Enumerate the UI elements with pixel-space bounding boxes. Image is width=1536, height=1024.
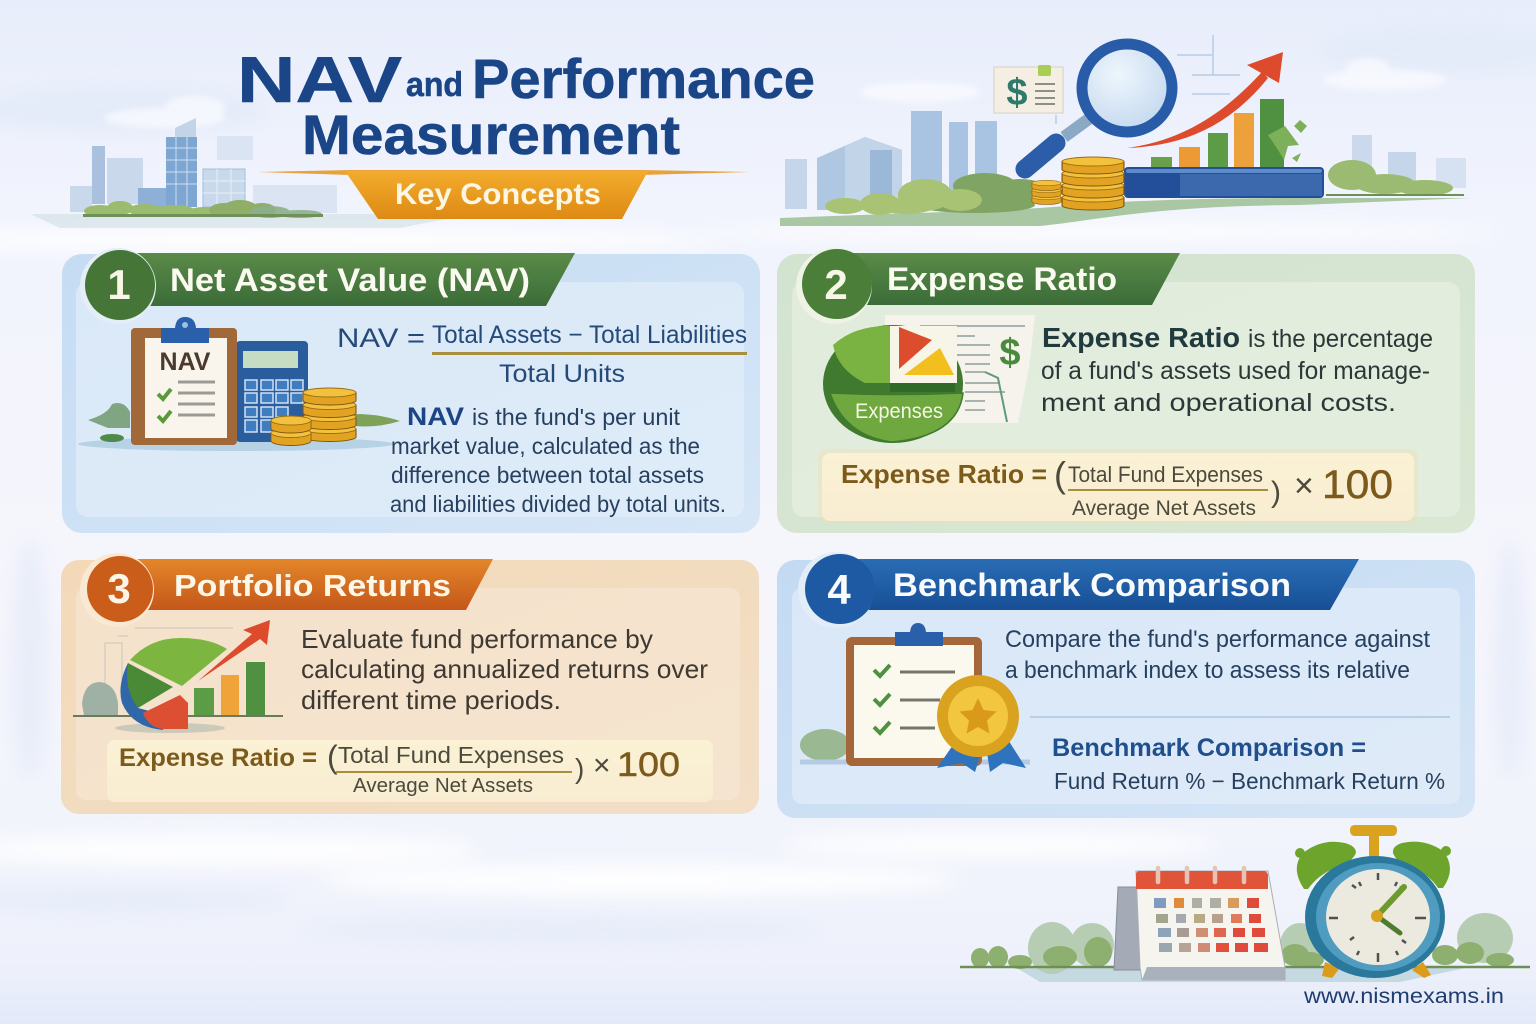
NAV formula: Total Assets − Total Liabilities [432, 321, 747, 349]
panel 2 heading: Expense Ratio [887, 261, 1117, 297]
subtitle ribbon: Key Concepts [395, 178, 601, 211]
Expense Ratio formula box: 100 [1322, 463, 1393, 507]
NAV description: NAV [407, 403, 464, 431]
skyline left [30, 118, 470, 228]
title [237, 43, 815, 166]
NAV formula [337, 321, 747, 388]
icon: expenses pie chart and document: $ [999, 332, 1021, 374]
Portfolio Returns description: Evaluate fund performance by [301, 624, 653, 654]
Portfolio Returns formula box: 100 [617, 746, 680, 784]
subtitle ribbon [258, 170, 750, 219]
icon: expenses pie chart and document [823, 315, 1035, 443]
icon: NAV clipboard with calculator and coins: NAV [160, 348, 211, 376]
panel 4 heading: Benchmark Comparison [893, 567, 1291, 603]
panel 2 heading: 2 [824, 261, 848, 308]
icon: coin stacks [1032, 157, 1124, 210]
icon: calendar [1114, 868, 1285, 980]
clouds [105, 58, 1447, 128]
NAV description [390, 403, 726, 517]
Benchmark formula [1052, 734, 1445, 794]
Expense Ratio description: of a fund's assets used for manage- [1041, 357, 1430, 385]
icon: alarm clock [1295, 825, 1451, 978]
panel 1: Net Asset Value [62, 248, 760, 533]
Portfolio Returns formula box: ( [327, 739, 338, 775]
Benchmark formula: Benchmark Comparison = [1052, 734, 1366, 762]
title: Performance [472, 47, 815, 110]
Expense Ratio description: Expense Ratio [1042, 322, 1240, 353]
Expense Ratio formula box [818, 449, 1418, 523]
Portfolio Returns description: calculating annualized returns over [301, 654, 708, 684]
Expense Ratio description: is the percentage [1248, 325, 1433, 353]
panel 3 heading [80, 553, 493, 627]
illustration: calendar and alarm clock [960, 825, 1530, 982]
panel 4: Benchmark Comparison [777, 552, 1475, 818]
website credit: www.nismexams.in [1303, 985, 1504, 1008]
Portfolio Returns formula box: Expense Ratio = [119, 744, 317, 772]
NAV formula: Total Units [499, 360, 625, 388]
panel 1 heading: 1 [107, 261, 131, 308]
panel 3 heading: 3 [107, 565, 131, 612]
title: NAV [237, 43, 402, 116]
panel 3 heading: Portfolio Returns [174, 568, 451, 603]
illustration: growth chart and magnifier [780, 35, 1470, 226]
Expense Ratio formula box: × [1294, 467, 1314, 505]
panel 2: Expense Ratio [777, 248, 1475, 533]
NAV description: and liabilities divided by total units. [390, 491, 726, 517]
panel 4 heading [798, 552, 1359, 628]
icon: expenses pie chart and document: Expenses [855, 400, 943, 423]
Portfolio Returns formula box [107, 739, 713, 802]
Expense Ratio formula box: Total Fund Expenses [1068, 462, 1263, 487]
icon: returns chart with pie [73, 620, 283, 733]
NAV description: is the fund's per unit [472, 404, 681, 430]
title: and [406, 66, 463, 104]
Portfolio Returns formula box: Average Net Assets [353, 775, 533, 797]
Portfolio Returns description [301, 624, 708, 715]
icon: dollar note: $ [1006, 72, 1028, 114]
panel 2 heading [796, 248, 1180, 324]
panel 3: Portfolio Returns [61, 553, 759, 814]
Portfolio Returns formula box: × [593, 749, 611, 782]
NAV formula: NAV = [337, 323, 425, 353]
NAV description: market value, calculated as the [391, 433, 700, 459]
NAV description: difference between total assets [391, 462, 704, 488]
title: Measurement [302, 103, 680, 166]
Expense Ratio formula box: ( [1054, 454, 1066, 495]
Benchmark description: Compare the fund's performance against [1005, 626, 1430, 653]
Benchmark description: a benchmark index to assess its relative [1005, 657, 1410, 684]
Portfolio Returns formula box: ) [575, 753, 584, 784]
Expense Ratio description: ment and operational costs. [1041, 389, 1396, 417]
panel 1 heading: Net Asset Value (NAV) [170, 262, 530, 298]
Expense Ratio formula box: ) [1271, 476, 1281, 509]
icon: clipboard with award medal [800, 623, 1030, 772]
Portfolio Returns formula box: Total Fund Expenses [338, 742, 564, 768]
Expense Ratio formula box: Expense Ratio = [841, 459, 1047, 489]
Expense Ratio description [1041, 322, 1433, 417]
panel 4 heading: 4 [827, 566, 851, 613]
Expense Ratio formula box: Average Net Assets [1072, 497, 1256, 520]
icon: NAV clipboard with calculator and coins [78, 317, 400, 451]
icon: magnifying glass [1025, 44, 1172, 169]
Benchmark formula: Fund Return % − Benchmark Return % [1054, 768, 1445, 794]
panel 1 heading [80, 248, 575, 324]
Benchmark description [1005, 626, 1430, 684]
Portfolio Returns description: different time periods. [301, 685, 561, 715]
icon: dollar note [994, 65, 1063, 114]
